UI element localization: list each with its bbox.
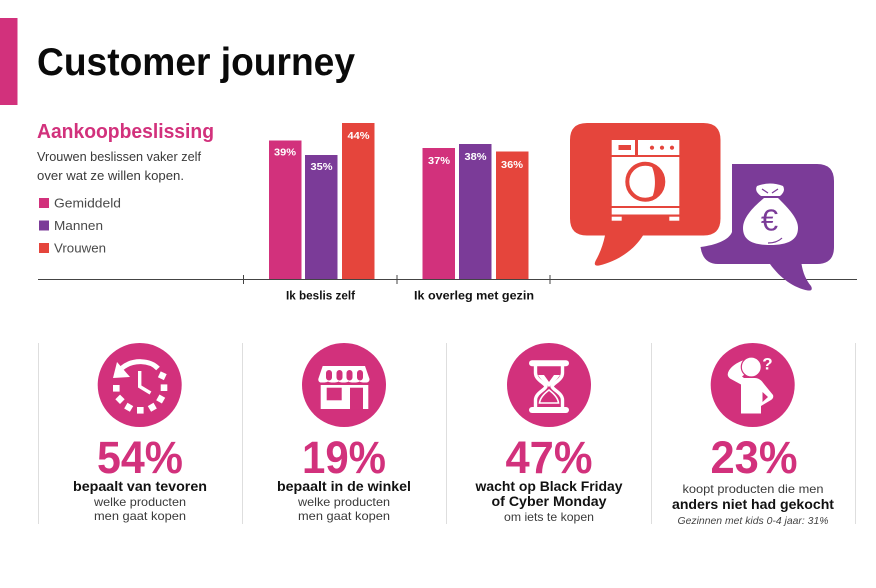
caption: anders niet had gekocht — [672, 497, 835, 512]
caption: om iets te kopen — [504, 510, 594, 524]
bar chart — [38, 123, 857, 302]
caption — [672, 482, 835, 527]
caption: men gaat kopen — [94, 509, 186, 523]
icon: thinking person: ? — [762, 354, 773, 374]
statistic: 19% — [302, 432, 386, 483]
bars: Ik beslis zelf — [269, 123, 374, 280]
axis labels: Ik overleg met gezin — [414, 290, 534, 302]
caption — [474, 479, 623, 524]
bars: Ik beslis zelf: 35% — [310, 161, 333, 173]
caption: of Cyber Monday — [492, 494, 607, 509]
bars: Ik beslis zelf: 44% — [348, 130, 370, 142]
icon: hourglass — [507, 343, 591, 427]
caption: bepaalt in de winkel — [277, 479, 411, 494]
bars: Ik overleg met gezin: 36% — [501, 159, 524, 171]
icon: purple speech bubble with money bag: € — [761, 202, 778, 238]
legend: Gemiddeld — [54, 196, 121, 210]
statistic: 23% — [710, 432, 798, 483]
icon: thinking person — [711, 343, 795, 427]
bars: Ik overleg met gezin — [422, 144, 528, 280]
icon: clock with arrow — [98, 343, 182, 427]
description text: over wat ze willen kopen. — [37, 168, 184, 183]
icon: store — [302, 343, 386, 427]
title: Customer journey — [37, 41, 355, 84]
statistic: 54% — [97, 432, 183, 483]
axis labels: Ik beslis zelf — [286, 290, 355, 302]
caption: bepaalt van tevoren — [73, 479, 207, 494]
caption: wacht op Black Friday — [474, 479, 623, 494]
description text: Vrouwen beslissen vaker zelf — [37, 149, 201, 164]
caption — [73, 479, 207, 523]
legend — [39, 196, 121, 256]
column dividers — [38, 343, 856, 524]
statistic: 47% — [506, 432, 592, 483]
bars: Ik overleg met gezin: 37% — [428, 155, 451, 167]
caption: koopt producten die men — [682, 482, 824, 496]
bars: Ik overleg met gezin: 38% — [464, 151, 487, 163]
panel: 54% bepaalt van tevoren — [73, 343, 207, 523]
description text — [37, 149, 201, 183]
accent bar — [0, 18, 18, 105]
axis labels — [286, 290, 534, 302]
panel: 47% wacht op Black Friday — [474, 343, 623, 524]
caption: welke producten — [297, 495, 390, 509]
legend: Mannen — [54, 218, 103, 233]
panel: aankoopbeslissing intro and legend — [37, 121, 214, 256]
caption — [277, 479, 411, 523]
panel: 23% koopt producten — [672, 343, 835, 527]
caption: men gaat kopen — [298, 509, 390, 523]
icon: red speech bubble with washing machine — [570, 123, 720, 266]
heading: Aankoopbeslissing — [37, 121, 214, 143]
caption: Gezinnen met kids 0-4 jaar: 31% — [678, 515, 828, 527]
icon: purple speech bubble with money bag — [700, 164, 834, 291]
legend: Vrouwen — [54, 240, 106, 256]
bars: Ik beslis zelf: 39% — [274, 146, 297, 158]
caption: welke producten — [93, 495, 186, 509]
panel: 19% bepaalt in de winkel — [277, 343, 411, 523]
